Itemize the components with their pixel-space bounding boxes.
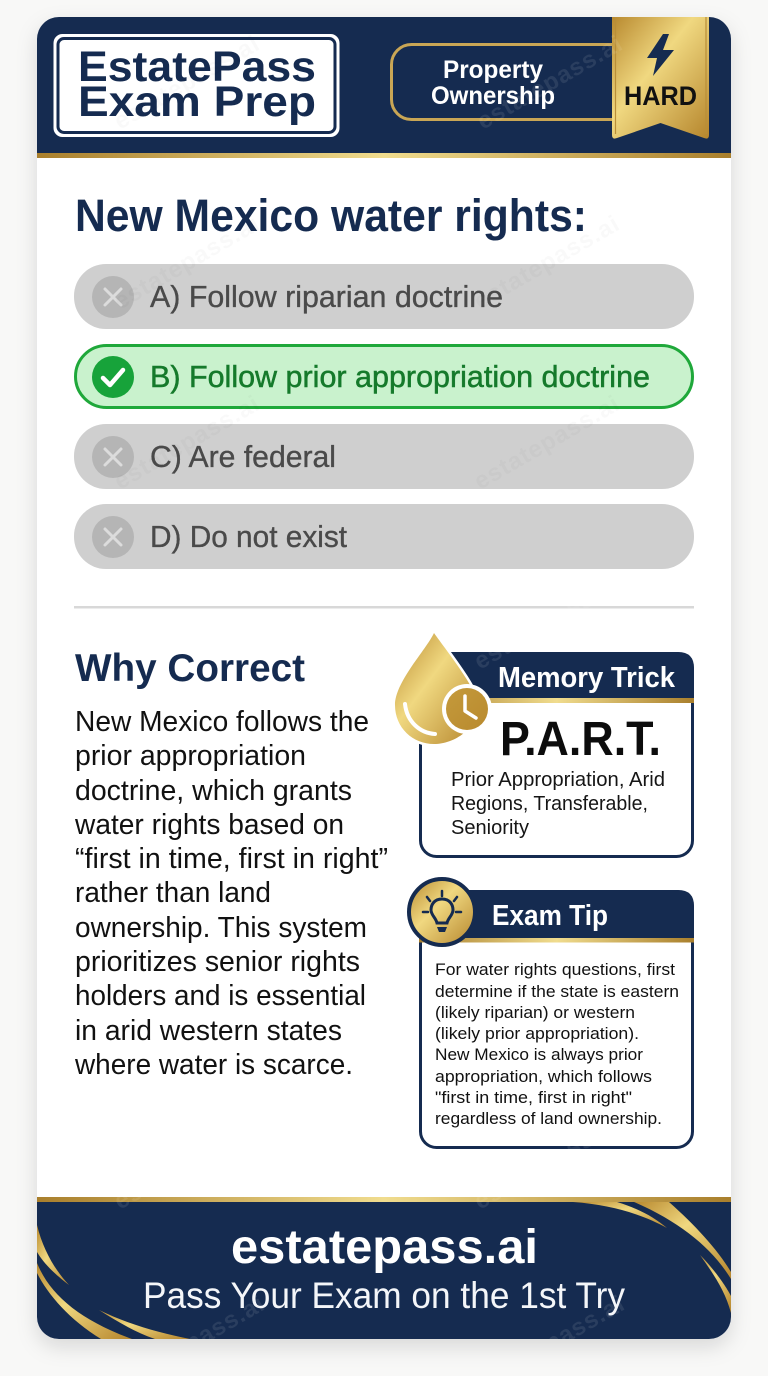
tip text: appropriation, which follows bbox=[435, 1067, 652, 1086]
logo bbox=[54, 35, 338, 136]
watermarks: estatepass.ai bbox=[110, 210, 265, 315]
explanation text: water rights based on bbox=[74, 809, 344, 841]
panel: exam tip: Exam Tip bbox=[492, 900, 608, 932]
mnemonic: P.A.R.T. bbox=[500, 713, 661, 766]
tip text: regardless of land ownership. bbox=[435, 1109, 662, 1128]
panel: exam tip bbox=[419, 890, 694, 1148]
tip text: (likely riparian) or western bbox=[435, 1003, 635, 1022]
tip text bbox=[435, 960, 679, 1128]
explanation text: prioritizes senior rights bbox=[75, 946, 360, 978]
category pill: Ownership bbox=[431, 82, 555, 110]
explanation text: prior appropriation bbox=[75, 740, 306, 772]
explanation text: doctrine, which grants bbox=[75, 775, 352, 807]
option A bbox=[74, 264, 694, 329]
logo: Exam Prep bbox=[78, 78, 316, 126]
option D: D) Do not exist bbox=[150, 519, 347, 554]
option B correct bbox=[76, 346, 692, 408]
mnemonic text bbox=[451, 768, 665, 839]
option A: A) Follow riparian doctrine bbox=[150, 279, 503, 314]
watermarks: estatepass.ai bbox=[470, 390, 625, 495]
option B correct: B) Follow prior appropriation doctrine bbox=[150, 359, 650, 394]
gold swooshes bbox=[37, 1202, 731, 1339]
watermarks: estatepass.ai bbox=[110, 390, 265, 495]
logo: EstatePass bbox=[78, 43, 316, 91]
watermarks: estatepass.ai bbox=[472, 30, 628, 135]
footer: estatepass.ai bbox=[231, 1221, 538, 1274]
icon: light bulb bbox=[409, 879, 475, 945]
tip text: New Mexico is always prior bbox=[435, 1045, 643, 1064]
option D bbox=[74, 504, 694, 569]
explanation text: holders and is essential bbox=[75, 980, 366, 1012]
watermarks: estatepass.ai bbox=[470, 570, 625, 675]
explanation text: New Mexico follows the bbox=[75, 706, 369, 738]
difficulty ribbon bbox=[612, 17, 709, 139]
header bbox=[37, 17, 731, 158]
tip text: "first in time, first in right" bbox=[435, 1088, 632, 1107]
mnemonic text: Seniority bbox=[451, 816, 530, 839]
panel: memory trick: Memory Trick bbox=[498, 662, 676, 694]
explanation text: in arid western states bbox=[75, 1015, 342, 1047]
icon: lightning bolt bbox=[647, 34, 674, 76]
tip text: determine if the state is eastern bbox=[435, 982, 679, 1001]
tip text: (likely prior appropriation). bbox=[435, 1024, 639, 1043]
explanation text: ownership. This system bbox=[75, 912, 367, 944]
watermarks bbox=[110, 30, 630, 1376]
footer: Pass Your Exam on the 1st Try bbox=[143, 1275, 625, 1316]
option C bbox=[74, 424, 694, 489]
category pill: Property bbox=[443, 56, 543, 84]
difficulty ribbon: HARD bbox=[624, 81, 697, 111]
footer bbox=[37, 1197, 731, 1339]
explanation text: “first in time, first in right” bbox=[75, 843, 388, 875]
mnemonic text: Regions, Transferable, bbox=[451, 792, 648, 815]
mnemonic text: Prior Appropriation, Arid bbox=[451, 768, 665, 791]
explanation text: where water is scarce. bbox=[74, 1049, 353, 1081]
question title: New Mexico water rights: bbox=[75, 190, 587, 241]
option C: C) Are federal bbox=[150, 439, 336, 474]
why correct heading: Why Correct bbox=[75, 647, 305, 690]
explanation text bbox=[74, 706, 388, 1081]
watermarks: estatepass.ai bbox=[110, 1110, 265, 1215]
explanation text: rather than land bbox=[75, 877, 271, 909]
panel: memory trick bbox=[419, 652, 694, 856]
watermarks: estatepass.ai bbox=[470, 210, 625, 315]
category pill bbox=[392, 44, 642, 120]
watermarks: estatepass.ai bbox=[470, 1110, 625, 1215]
tip text: For water rights questions, first bbox=[435, 960, 675, 979]
watermarks: estatepass.ai bbox=[110, 30, 265, 135]
icon: water drop with clock bbox=[395, 633, 492, 744]
